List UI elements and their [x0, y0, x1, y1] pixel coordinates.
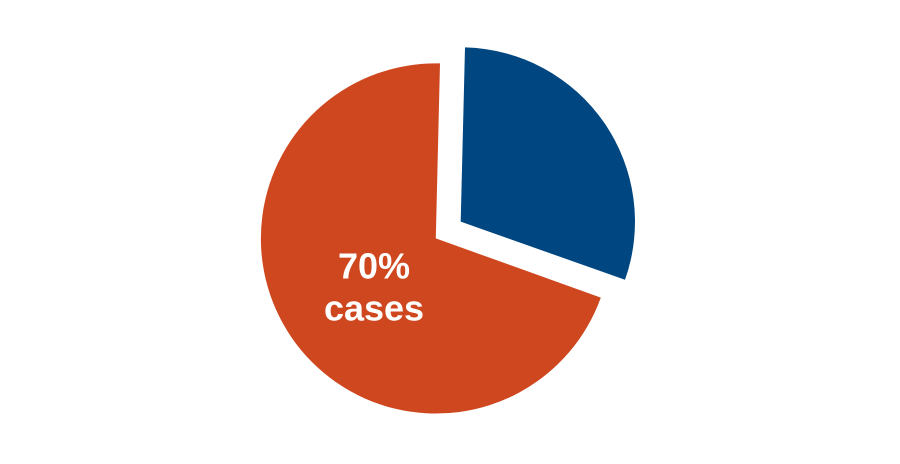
label: 70% cases: 70%: [338, 246, 410, 286]
label: 70% cases: cases: [324, 288, 424, 328]
label: 70% cases: [324, 246, 424, 328]
slice: 30% exploded (blue): [461, 47, 635, 280]
slice: 70% cases (orange-red): [261, 63, 601, 414]
